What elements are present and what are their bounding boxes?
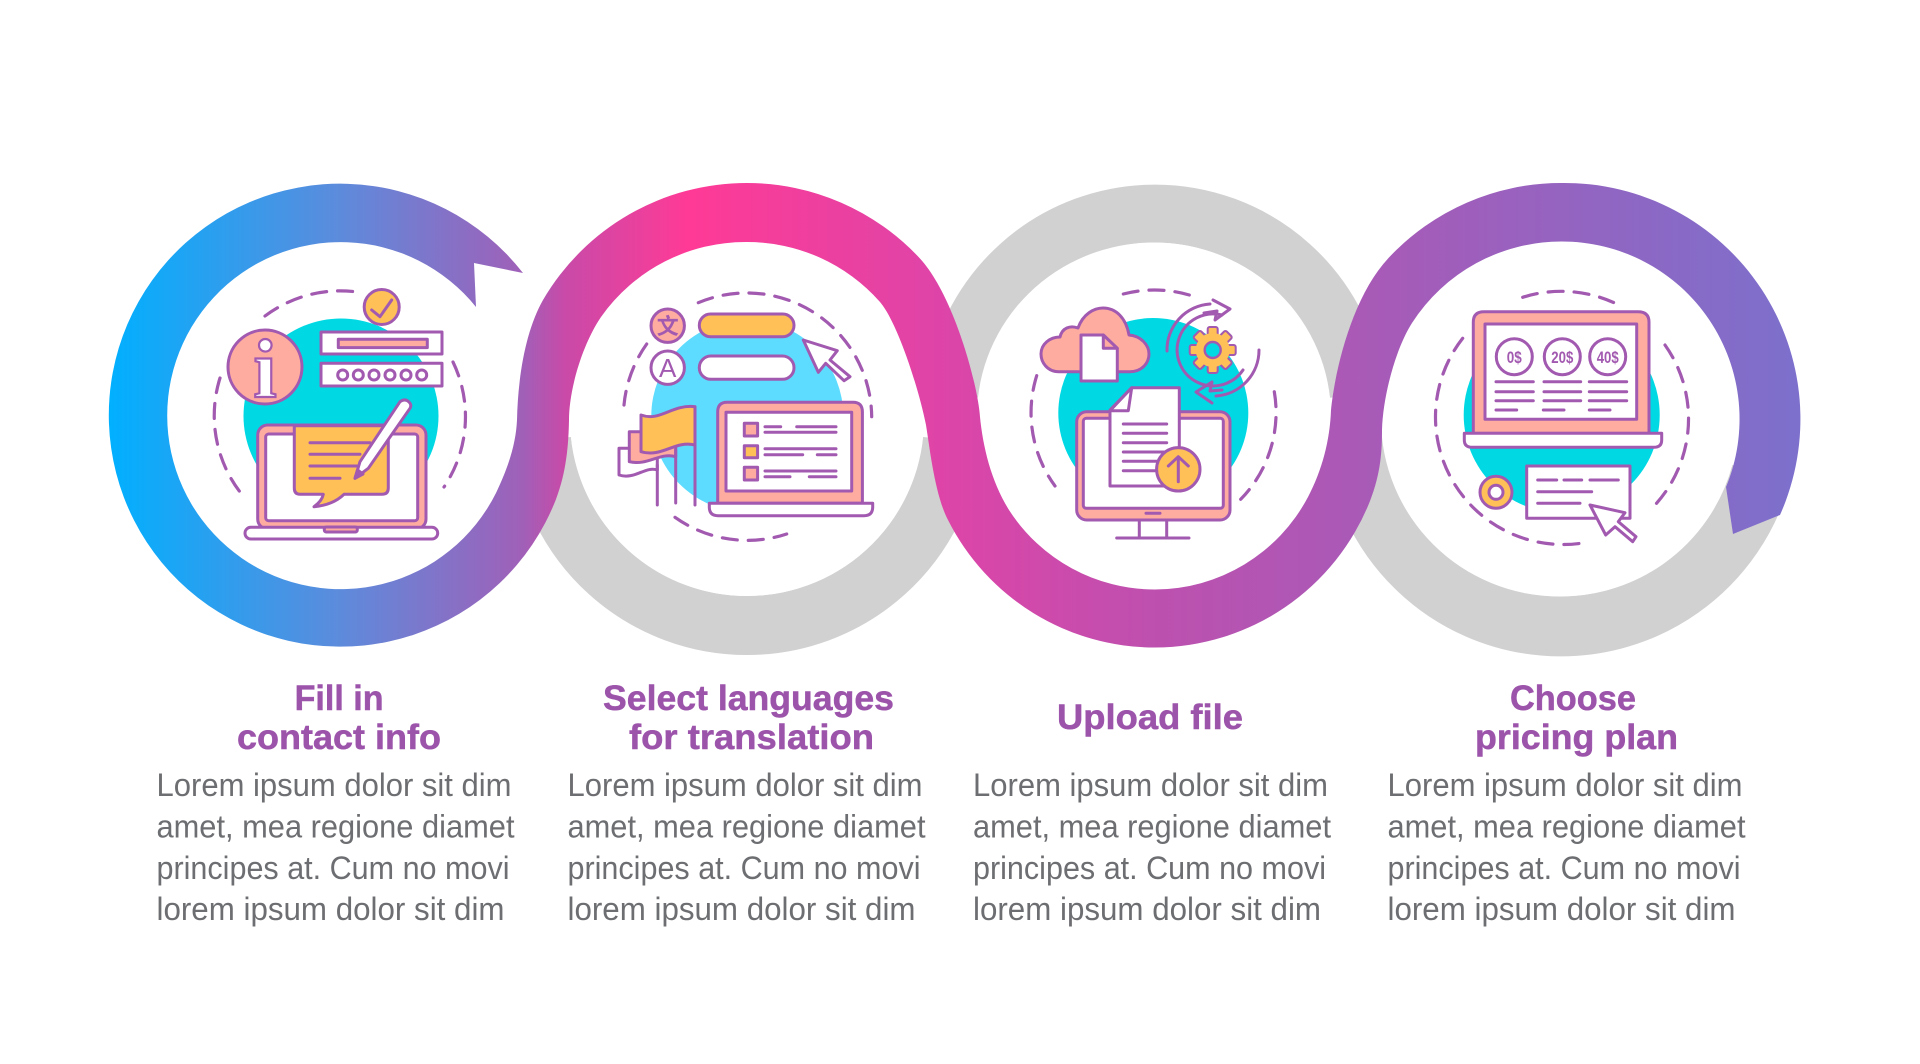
white interior: step 2 bbox=[570, 242, 924, 596]
price 20$: 20$ bbox=[1551, 348, 1574, 367]
step 1 heading bbox=[237, 679, 441, 757]
step 1 heading: contact info bbox=[237, 718, 441, 757]
step 2 body: Lorem ipsum dolor sit dim bbox=[568, 767, 922, 803]
white interior: step 3 bbox=[977, 242, 1331, 590]
step 1 body: amet, mea regione diamet bbox=[156, 808, 515, 844]
step 1 text bbox=[156, 679, 515, 927]
chinese language badge bbox=[651, 309, 684, 342]
step 2 body: amet, mea regione diamet bbox=[568, 808, 926, 844]
step 1 body bbox=[156, 767, 515, 927]
step 2 body bbox=[568, 767, 926, 927]
white interior: step 1 bbox=[167, 242, 517, 590]
white language option bbox=[699, 356, 794, 379]
step 1 body: lorem ipsum dolor sit dim bbox=[156, 891, 504, 927]
step 4 body: Lorem ipsum dolor sit dim bbox=[1388, 767, 1742, 803]
info badge: i bbox=[253, 323, 277, 416]
upload badge bbox=[1157, 448, 1200, 491]
step 3 body bbox=[973, 767, 1331, 927]
chinese language badge: 文 bbox=[657, 309, 679, 341]
selection card bbox=[1527, 466, 1630, 518]
grey arc: step 3 upper half bbox=[954, 214, 1356, 395]
check badge bbox=[364, 290, 399, 324]
step 1 body: Lorem ipsum dolor sit dim bbox=[156, 767, 512, 803]
laptop with checklist bbox=[709, 402, 873, 516]
step 2 heading: for translation bbox=[629, 718, 874, 757]
dashed orbit bbox=[1031, 290, 1276, 499]
step 2 heading: Select languages bbox=[603, 679, 894, 718]
pencil bbox=[355, 400, 411, 478]
icon: contact info form on laptop bbox=[214, 290, 465, 539]
latin language badge: A bbox=[659, 353, 677, 383]
gear bbox=[1190, 327, 1236, 373]
document bbox=[1110, 388, 1179, 486]
step 1 body: principes at. Cum no movi bbox=[156, 850, 510, 886]
cursor bbox=[1590, 505, 1636, 542]
cursor bbox=[803, 340, 850, 381]
price 40$: 40$ bbox=[1597, 348, 1619, 367]
price 20$ bbox=[1544, 339, 1580, 375]
dashed orbit bbox=[214, 291, 465, 492]
gradient ribbon arrow connecting the steps bbox=[109, 183, 1800, 648]
step 4 text bbox=[1388, 679, 1746, 927]
name field bbox=[321, 332, 442, 354]
step 2 body: lorem ipsum dolor sit dim bbox=[568, 891, 916, 927]
step 3 heading: Upload file bbox=[1057, 698, 1243, 737]
info badge bbox=[228, 323, 302, 416]
password field bbox=[321, 363, 442, 386]
step 3 body: Lorem ipsum dolor sit dim bbox=[973, 767, 1328, 803]
step 3 body: lorem ipsum dolor sit dim bbox=[973, 891, 1321, 927]
teal backdrop circle bbox=[244, 318, 438, 514]
dashed orbit bbox=[624, 293, 872, 540]
dashed orbit bbox=[1435, 291, 1689, 545]
step 3 text bbox=[973, 698, 1331, 927]
icon: file upload bbox=[1031, 290, 1276, 538]
step 1 heading: Fill in bbox=[295, 679, 384, 718]
step 4 body: principes at. Cum no movi bbox=[1388, 850, 1740, 886]
step 2 body: principes at. Cum no movi bbox=[568, 850, 920, 886]
step 4 heading: Choose bbox=[1510, 679, 1636, 718]
step 4 body: lorem ipsum dolor sit dim bbox=[1388, 891, 1736, 927]
step 3 body: principes at. Cum no movi bbox=[973, 850, 1326, 886]
refresh arrows bbox=[1167, 300, 1259, 403]
teal backdrop circle bbox=[1058, 318, 1248, 508]
laptop bbox=[245, 425, 438, 539]
grey arc: step 4 lower half bbox=[1355, 440, 1761, 626]
price 0$ bbox=[1496, 339, 1532, 375]
cloud with file bbox=[1041, 308, 1149, 381]
laptop with prices bbox=[1464, 312, 1662, 447]
step 4 body: amet, mea regione diamet bbox=[1388, 808, 1746, 844]
chat bubble bbox=[294, 426, 388, 507]
step 4 heading: pricing plan bbox=[1475, 718, 1678, 757]
target ring bbox=[1480, 476, 1512, 508]
blue backdrop circle bbox=[651, 320, 843, 512]
grey arc: step 2 lower half bbox=[542, 440, 952, 626]
step 4 body bbox=[1388, 767, 1746, 927]
icon: language selection bbox=[619, 293, 873, 540]
step 2 heading bbox=[603, 679, 894, 757]
icon: pricing plans bbox=[1435, 291, 1689, 545]
price 40$ bbox=[1590, 339, 1626, 375]
latin language badge bbox=[651, 351, 684, 384]
plan feature lines bbox=[1496, 382, 1627, 410]
price 0$: 0$ bbox=[1507, 348, 1522, 367]
flags bbox=[619, 406, 695, 505]
step 3 body: amet, mea regione diamet bbox=[973, 808, 1331, 844]
orange language option bbox=[699, 314, 794, 337]
teal backdrop circle bbox=[1464, 317, 1660, 513]
step 2 text bbox=[568, 679, 926, 927]
monitor bbox=[1077, 412, 1230, 538]
white interior: step 4 bbox=[1381, 242, 1738, 596]
step 4 heading bbox=[1475, 679, 1678, 757]
